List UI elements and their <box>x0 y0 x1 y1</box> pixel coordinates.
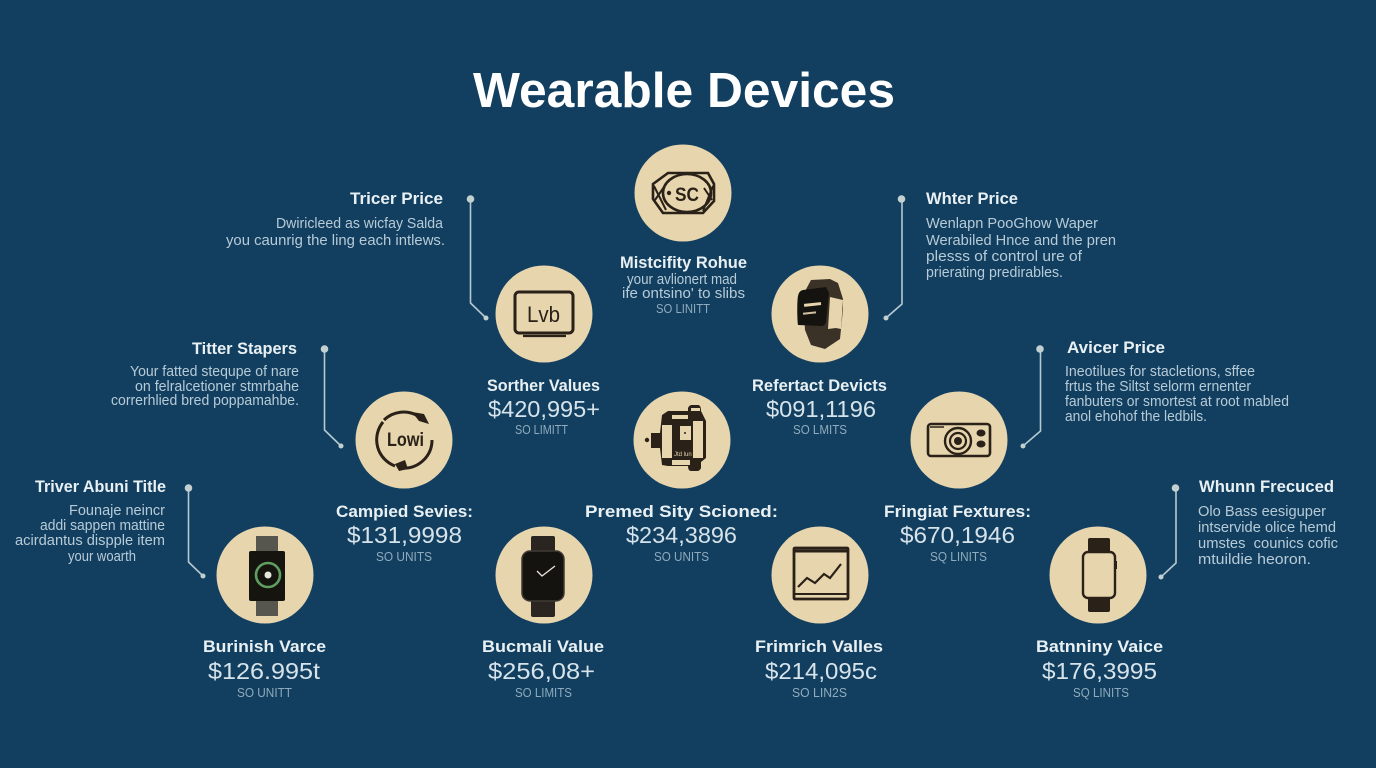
callout: lower right <box>1158 477 1338 580</box>
heading block: centre top: your avlionert mad <box>627 272 737 288</box>
icon: device machine <box>634 392 730 488</box>
callout: middle right: Avicer Price <box>1067 338 1165 357</box>
icon: line chart tablet <box>772 526 868 624</box>
icon: recycle ring <box>356 392 452 488</box>
heading block: centre top: ife ontsino' to slibs <box>622 286 745 302</box>
icon: screen: Lvb <box>527 302 560 327</box>
callout: lower left: acirdantus dispple item <box>15 533 165 549</box>
callout: top right: Whter Price <box>926 189 1018 208</box>
icon: band badge: SC <box>675 185 699 206</box>
callout: top left: Dwiricleed as wicfay Salda <box>276 216 444 232</box>
stat: frimrich valles: $214,095c <box>765 658 877 684</box>
stat: campied sevies <box>336 502 473 564</box>
callout: lower right: mtuildie heoron. <box>1198 552 1311 568</box>
stat: batnniny vaice: SQ LINITS <box>1073 686 1129 700</box>
callout: lower left: your woarth <box>68 549 136 565</box>
stat: batnniny vaice: Batnniny Vaice <box>1036 637 1163 656</box>
stat: campied sevies: Campied Sevies: <box>336 502 473 521</box>
callout: lower right: intservide olice hemd <box>1198 520 1336 536</box>
heading block: centre top: Mistcifity Rohue <box>620 253 747 272</box>
stat: bucmali value: $256,08+ <box>488 658 595 684</box>
callout: top right: plesss of control ure of <box>926 249 1083 265</box>
stat: refertact devicts: Refertact Devicts <box>752 376 887 395</box>
stat: bucmali value <box>482 637 604 700</box>
callout: lower right: umstes counics cofic <box>1198 536 1338 552</box>
stat: campied sevies: $131,9998 <box>347 522 462 548</box>
stat: frimrich valles: SO LIN2S <box>792 686 847 700</box>
stat: fringiat fextures: SQ LINITS <box>930 550 987 564</box>
stat: fringiat fextures: $670,1946 <box>900 522 1015 548</box>
callout: middle left <box>111 339 344 448</box>
icon: analog smartwatch <box>496 526 592 624</box>
stat: sorther values: $420,995+ <box>488 396 600 422</box>
stat: burinish varce: Burinish Varce <box>203 637 326 656</box>
heading block: centre top <box>620 253 747 316</box>
stat: burinish varce: $126.995t <box>208 658 321 684</box>
stat: refertact devicts <box>752 376 887 437</box>
stat: premed sity scioned <box>585 502 778 564</box>
stat: fringiat fextures <box>884 502 1031 564</box>
title: Wearable Devices <box>473 64 895 118</box>
callout: middle left: on felralcetioner stmrbahe <box>135 379 299 395</box>
stat: frimrich valles <box>755 637 883 700</box>
icon: fitness smartwatch <box>216 526 314 624</box>
callout: middle left: Titter Stapers <box>192 339 297 358</box>
callout: lower left: Triver Abuni Title <box>35 477 166 496</box>
icon: device machine: Jtd lun <box>674 452 692 458</box>
stat: fringiat fextures: Fringiat Fextures: <box>884 502 1031 521</box>
stat: sorther values: SO LIMITT <box>515 423 568 437</box>
icon: band badge <box>634 144 732 242</box>
callout: lower right: Whunn Frecuced <box>1199 477 1334 496</box>
stat: burinish varce: SO UNITT <box>237 686 292 700</box>
callout: lower left: Founaje neincr <box>69 503 165 519</box>
callout: top right: Werabiled Hnce and the pren <box>926 233 1116 249</box>
stat: sorther values: Sorther Values <box>487 376 600 395</box>
icon: camera <box>910 392 1008 488</box>
stat: sorther values <box>487 376 600 437</box>
callout: top left <box>226 189 488 320</box>
callout: middle left: correrhlied bred poppamahbe. <box>111 393 299 409</box>
callout: middle right <box>1020 338 1289 448</box>
stat: burinish varce <box>203 637 326 700</box>
stat: refertact devicts: SO LMITS <box>793 423 847 437</box>
stat: premed sity scioned: Premed Sity Scioned: <box>585 502 778 521</box>
callout: top right: Wenlapn PooGhow Waper <box>926 216 1098 232</box>
callout: top right: prierating predirables. <box>926 265 1063 281</box>
stat: premed sity scioned: $234,3896 <box>626 522 737 548</box>
callout: lower left: addi sappen mattine <box>40 518 165 534</box>
callout: lower left <box>15 477 206 578</box>
heading block: centre top: SO LINITT <box>656 302 710 316</box>
callout: middle left: Your fatted stequpe of nare <box>130 364 299 380</box>
stat: batnniny vaice <box>1036 637 1163 700</box>
stat: batnniny vaice: $176,3995 <box>1042 658 1157 684</box>
stat: campied sevies: SO UNITS <box>376 550 432 564</box>
stat: frimrich valles: Frimrich Valles <box>755 637 883 656</box>
callout: top right <box>884 189 1116 320</box>
callout: lower right: Olo Bass eesiguper <box>1198 504 1326 520</box>
stat: premed sity scioned: SO UNITS <box>654 550 709 564</box>
stat: refertact devicts: $091,1196 <box>766 396 876 422</box>
icon: tilted smartwatch <box>772 266 868 362</box>
icon: screen <box>496 266 592 362</box>
callout: middle right: frtus the Siltst selorm ernenter <box>1065 379 1251 395</box>
callout: middle right: anol ehohof the ledbils. <box>1065 409 1207 425</box>
icon: outline smartwatch <box>1050 526 1146 624</box>
icon: recycle ring: Lowi <box>387 430 424 451</box>
callout: top left: you caunrig the ling each intlews. <box>226 233 445 249</box>
callout: middle right: fanbuters or smortest at root mabled <box>1065 394 1289 410</box>
stat: bucmali value: Bucmali Value <box>482 637 604 656</box>
callout: middle right: Ineotilues for stacletions, sffee <box>1065 364 1255 380</box>
callout: top left: Tricer Price <box>350 189 443 208</box>
stat: bucmali value: SO LIMITS <box>515 686 572 700</box>
